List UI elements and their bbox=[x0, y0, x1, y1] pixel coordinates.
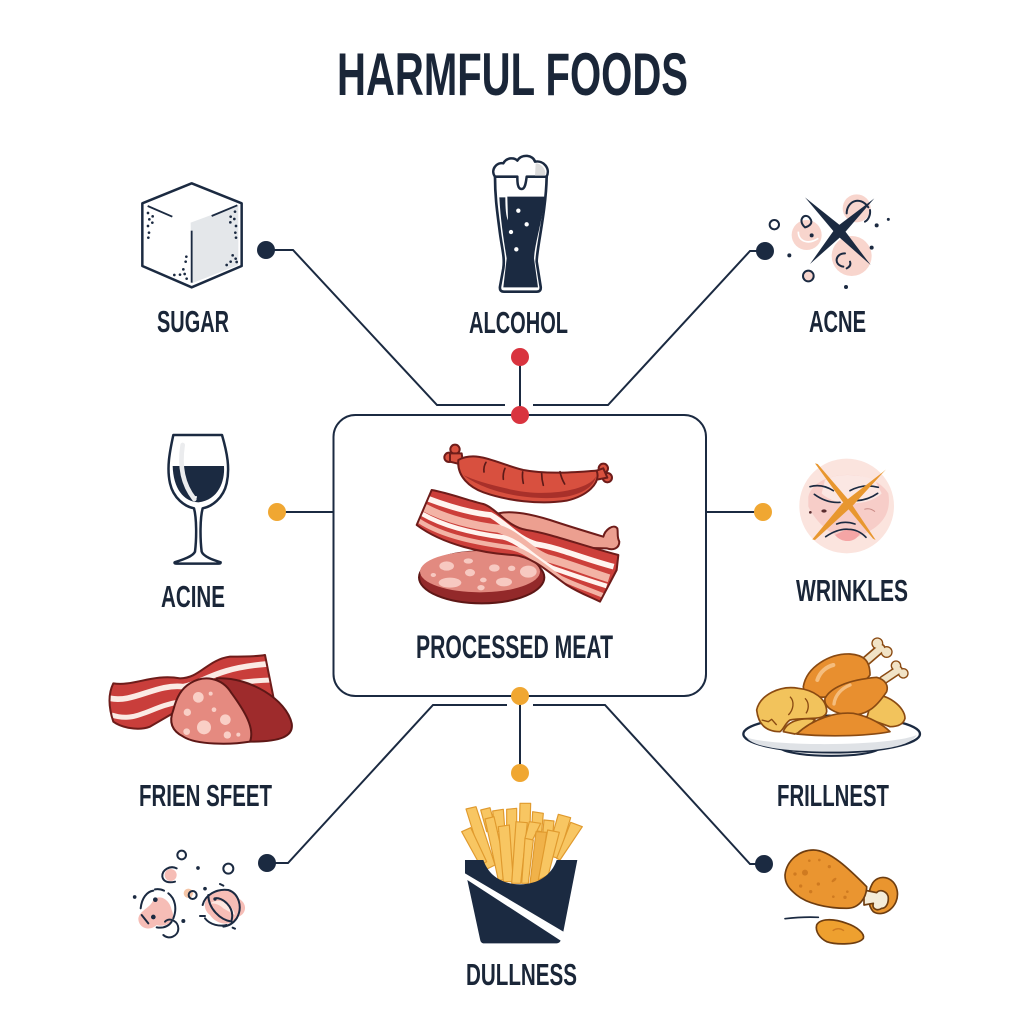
label: alcohol: ALCOHOL bbox=[469, 305, 568, 340]
icon: crossed wrinkled face bbox=[799, 459, 894, 553]
back bacon strip bbox=[498, 512, 619, 549]
connector dots bbox=[257, 241, 774, 873]
icon: sugar cube bbox=[142, 183, 242, 287]
icon: beer glass bbox=[493, 156, 548, 292]
label: frillnest: FRILLNEST bbox=[777, 778, 889, 813]
item: wrinkles bbox=[796, 459, 908, 608]
icon: crossed acne spots bbox=[770, 194, 890, 289]
label: sugar: SUGAR bbox=[157, 304, 229, 339]
panel: processed meat bbox=[334, 415, 706, 696]
item: acine bbox=[161, 435, 228, 614]
icon: bacon and salami chunk bbox=[103, 650, 292, 744]
plate bbox=[743, 716, 920, 756]
salami bbox=[419, 551, 544, 603]
icon: sausage bacon and salami bbox=[410, 445, 627, 607]
item: frien sfeet bbox=[103, 650, 292, 813]
label: acine: ACINE bbox=[161, 579, 225, 614]
icon: wine glass bbox=[168, 435, 228, 564]
item: sugar bbox=[142, 183, 242, 339]
item: alcohol bbox=[469, 156, 568, 340]
label: wrinkles: WRINKLES bbox=[796, 573, 908, 608]
chicken bones bbox=[863, 637, 909, 680]
item: dullness bbox=[462, 803, 582, 992]
item: frillnest bbox=[743, 637, 920, 813]
icon: skin bubbles bbox=[133, 851, 245, 937]
icon: plate of fried chicken bbox=[743, 637, 920, 756]
item: acne bbox=[770, 194, 890, 339]
label: acne: ACNE bbox=[809, 304, 866, 339]
title: HARMFUL FOODS bbox=[337, 41, 688, 108]
icon: fried chicken leg bbox=[785, 850, 898, 944]
connector lines bbox=[266, 250, 765, 864]
label: frien sfeet: FRIEN SFEET bbox=[139, 778, 272, 813]
label: dullness: DULLNESS bbox=[466, 957, 577, 992]
icon: french fries bbox=[462, 803, 582, 943]
label: processed meat: PROCESSED MEAT bbox=[416, 629, 613, 665]
front bacon bbox=[416, 489, 620, 603]
